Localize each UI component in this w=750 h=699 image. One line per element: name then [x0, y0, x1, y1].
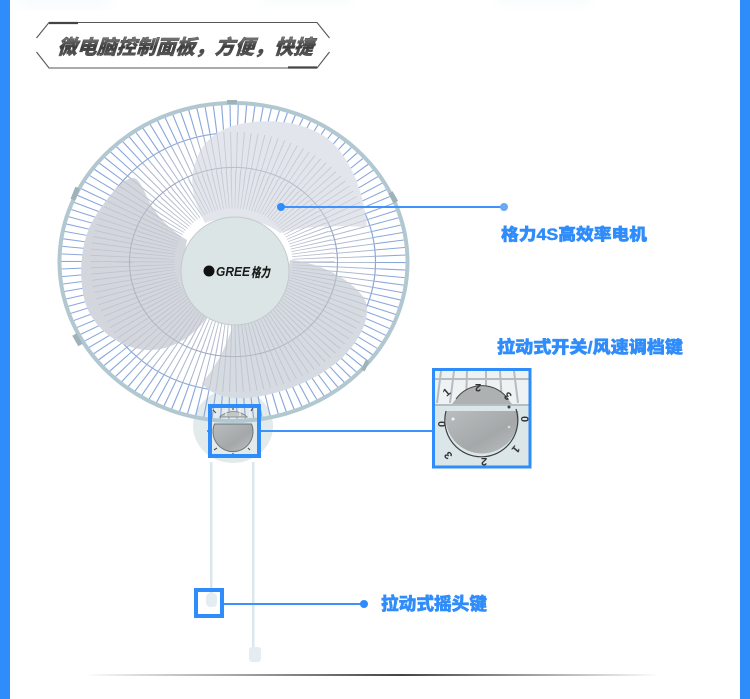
- inset numbers: 3: [442, 449, 455, 461]
- badge frame: [36, 22, 330, 68]
- title badge: [36, 22, 330, 68]
- end dot: [360, 600, 368, 608]
- guard wires: [76, 118, 392, 406]
- badge accents: [49, 23, 317, 68]
- floor shadow: [85, 674, 660, 676]
- start dot: [277, 203, 285, 211]
- inset numbers: 2: [475, 381, 481, 393]
- callout: oscillation cord: [196, 590, 488, 616]
- callout: speed switch: [210, 337, 683, 468]
- pull cord: left: [210, 462, 212, 594]
- wall mount base: [193, 389, 273, 463]
- inset numbers: 0: [435, 421, 447, 427]
- inset numbers: 1: [441, 386, 453, 399]
- pull handle: right: [249, 647, 261, 662]
- cord highlight box: [196, 590, 222, 616]
- inset numbers: 3: [502, 389, 514, 402]
- side bar: left: [0, 0, 10, 699]
- ring clips: [71, 100, 398, 371]
- pull handle: left: [206, 593, 217, 607]
- inset numbers: 2: [481, 455, 487, 467]
- blade: right: [202, 260, 367, 398]
- control knob: [207, 406, 259, 455]
- inset dial cap: [452, 386, 512, 404]
- inset border: [434, 370, 530, 467]
- title text: 微电脑控制面板，方便，快捷: [55, 35, 319, 59]
- leader line: [261, 430, 432, 432]
- brand logo: 格力: [251, 265, 271, 280]
- blade: top: [192, 121, 367, 233]
- fan: [60, 100, 408, 662]
- leader line: [281, 206, 504, 208]
- hub: [181, 217, 289, 325]
- switch label: 拉动式开关/风速调档键: [497, 337, 683, 357]
- magnified knob inset: [435, 371, 528, 466]
- inset numbers: [435, 381, 530, 467]
- side bar: right: [740, 0, 750, 699]
- callout: motor: [277, 203, 648, 244]
- switch highlight box: [210, 406, 259, 456]
- inset dial: [446, 411, 518, 454]
- inset numbers: 0: [518, 416, 530, 422]
- motor label: 格力4S高效率电机: [501, 224, 648, 244]
- pull cord: right: [252, 462, 254, 648]
- top glow patches: [20, 0, 590, 8]
- brand logo: GREE: [216, 264, 250, 279]
- inset numbers: 1: [509, 443, 522, 455]
- outer ring: [60, 103, 408, 421]
- end dot: [500, 203, 508, 211]
- blade: left: [81, 178, 207, 350]
- brand logo: [204, 264, 271, 280]
- front wires over blades: [112, 151, 356, 373]
- inset grille: [432, 371, 531, 405]
- leader line: [224, 603, 365, 605]
- oscillation label: 拉动式摇头键: [381, 594, 488, 614]
